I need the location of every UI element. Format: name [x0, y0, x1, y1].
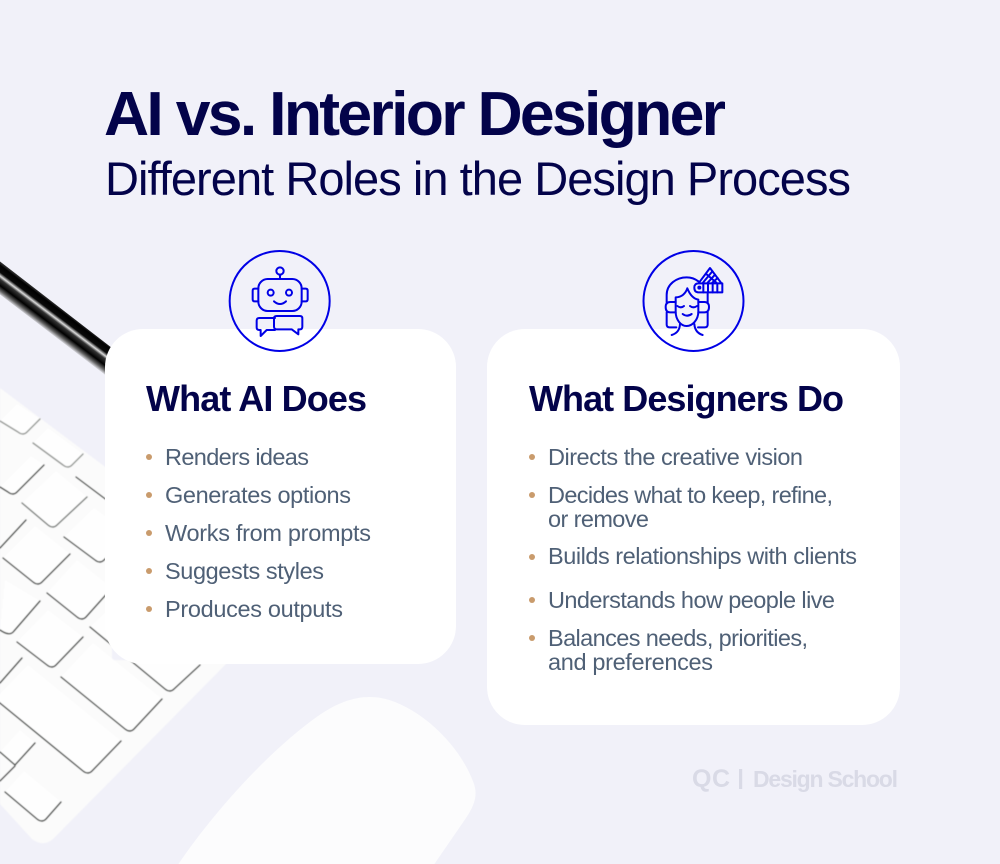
- list: designer tasks: Balances needs, priorities,: [548, 625, 808, 651]
- list: designer tasks: Directs the creative vision: [548, 444, 803, 470]
- list: AI tasks: Suggests styles: [165, 558, 324, 584]
- card background: [487, 329, 900, 725]
- list: AI tasks: [146, 444, 371, 622]
- icon: designer with colour swatch fan: [643, 251, 743, 351]
- heading: What AI Does: [146, 378, 367, 419]
- panel: What AI Does: [105, 329, 456, 664]
- list: AI tasks: Generates options: [165, 482, 351, 508]
- list: designer tasks: Builds relationships with clients: [548, 543, 857, 569]
- list: AI tasks: Renders ideas: [165, 444, 309, 470]
- panel: What Designers Do: [487, 329, 900, 725]
- heading: What Designers Do: [529, 378, 844, 419]
- logo: QC Design School: QC: [692, 765, 730, 793]
- subtitle: Different Roles in the Design Process: [105, 152, 851, 205]
- list: designer tasks: [529, 444, 857, 675]
- list: AI tasks: Produces outputs: [165, 596, 343, 622]
- list: designer tasks: and preferences: [548, 649, 713, 675]
- logo: QC Design School: Design School: [753, 766, 898, 792]
- title: AI vs. Interior Designer: [104, 79, 726, 149]
- list: designer tasks: or remove: [548, 506, 649, 532]
- card background: [105, 329, 456, 664]
- photo: white keyboard: [0, 388, 228, 843]
- list: designer tasks: Decides what to keep, refine,: [548, 482, 833, 508]
- list: AI tasks: Works from prompts: [165, 520, 371, 546]
- logo: QC Design School: [692, 765, 898, 793]
- list: designer tasks: Understands how people live: [548, 587, 835, 613]
- icon: robot with chat bubbles: [230, 251, 330, 351]
- photo: pen: [0, 260, 112, 380]
- photo: white mouse: [177, 697, 476, 864]
